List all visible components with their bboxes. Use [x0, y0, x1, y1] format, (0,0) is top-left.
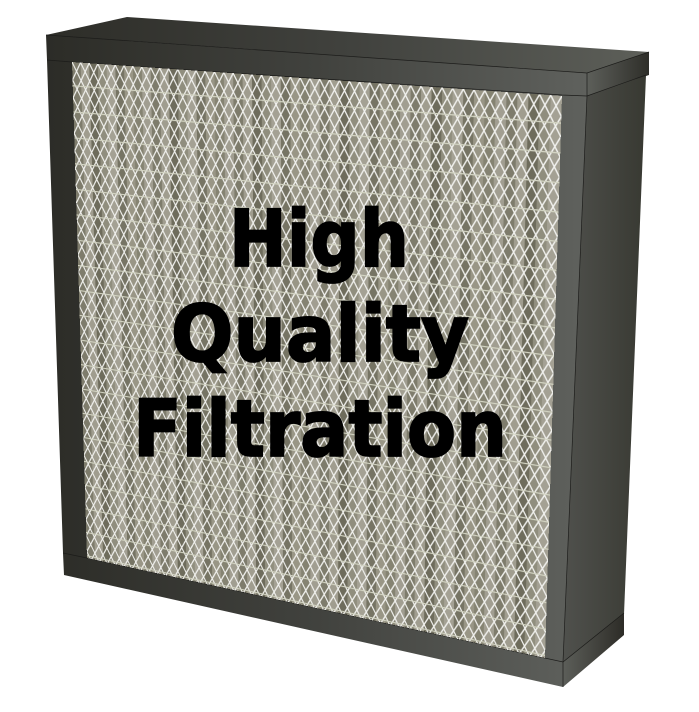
right lower band	[563, 613, 624, 687]
right side face	[563, 75, 646, 662]
heading: High Quality Filtration: Filtration	[133, 385, 507, 475]
horizontal threads	[72, 62, 562, 658]
right upper band	[587, 52, 649, 96]
heading: High Quality Filtration: High	[229, 195, 409, 285]
heading: High Quality Filtration: Quality	[171, 290, 469, 380]
diamond lattice	[72, 62, 562, 658]
front frame	[46, 35, 587, 687]
pleated filter media	[72, 62, 562, 658]
vertical pleat stripes	[72, 62, 562, 658]
top face	[46, 17, 649, 73]
